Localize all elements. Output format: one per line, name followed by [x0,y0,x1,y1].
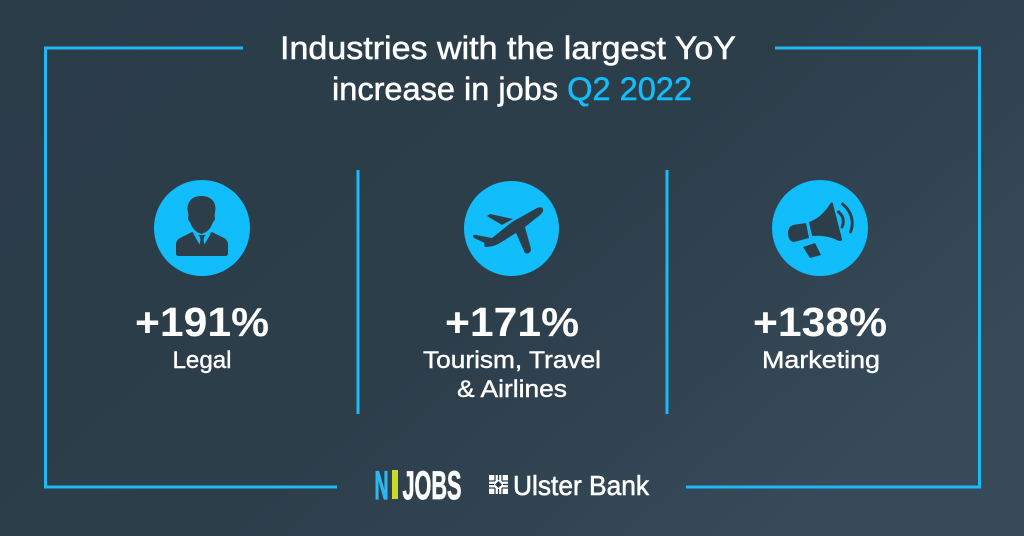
label: & Airlines [457,376,567,403]
value: +191% [135,299,269,345]
panel: tourism [423,181,601,403]
icon: Ulster Bank mark [489,475,508,494]
panel: legal [135,180,269,374]
logo: Ulster Bank: Ulster Bank [513,470,650,501]
icon: airplane [464,181,559,276]
icon: megaphone [772,180,868,276]
column dividers [358,170,667,414]
title [280,30,736,107]
logo: NI Jobs: JOBS [402,464,462,508]
frame border [46,48,980,487]
value: +171% [445,299,579,345]
panel: marketing [753,180,887,374]
icon: businessman [154,180,250,276]
title: Industries with the largest YoY [280,30,736,66]
label: Tourism, Travel [423,347,601,374]
label: Legal [172,347,232,374]
value: +138% [753,299,887,345]
title: increase in jobs Q2 2022 [332,71,692,107]
logo: NI Jobs: N [374,464,388,508]
logo: NI Jobs [374,464,462,508]
label: Marketing [762,347,880,374]
